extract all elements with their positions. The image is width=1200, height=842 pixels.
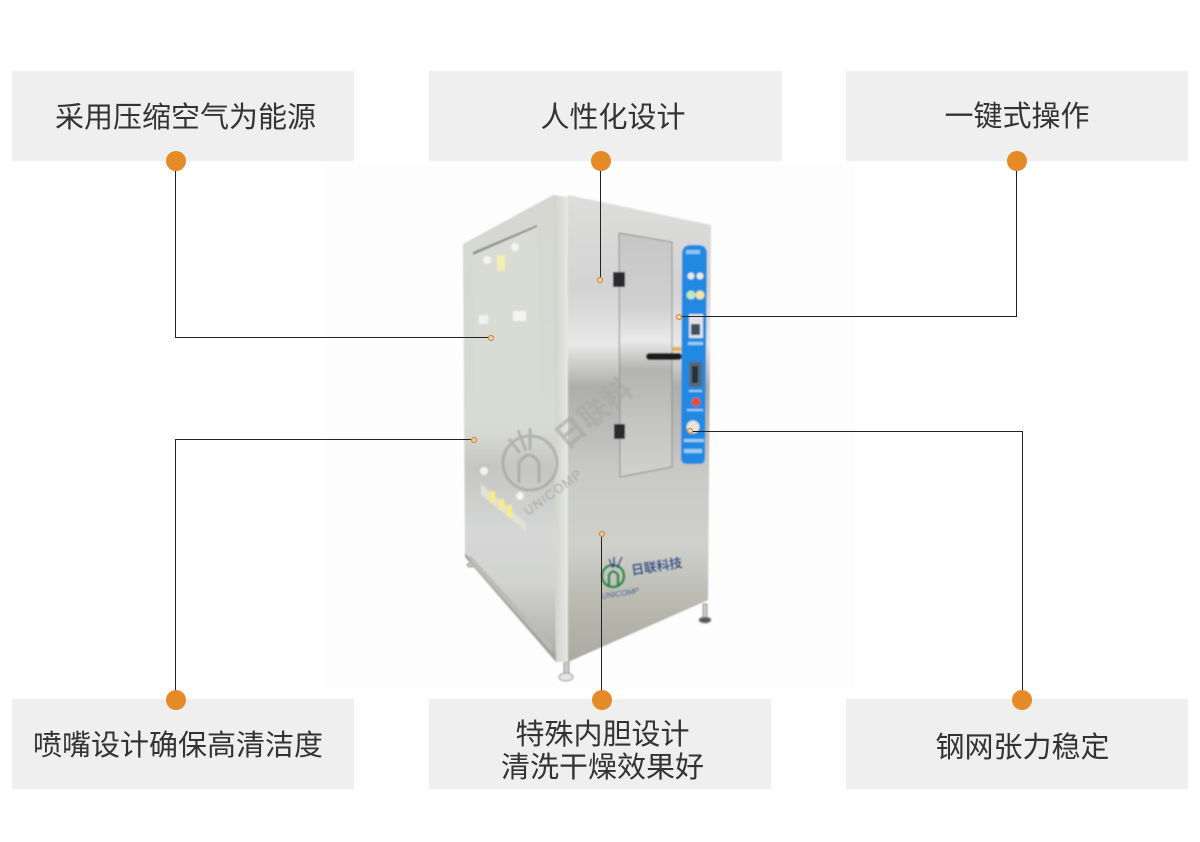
- label: user-friendly design: [429, 71, 782, 161]
- label: special inner tank: 清洗干燥效果好: [501, 752, 704, 784]
- front logo subtext: UNICOMP: [601, 586, 640, 601]
- machine feet: [467, 553, 711, 681]
- watermark brand characters: 日联科: [549, 372, 639, 455]
- label: stable stencil tension: [846, 699, 1188, 789]
- blue control panel: [681, 245, 707, 464]
- side labels and latches: [479, 243, 526, 531]
- corner pillar: [553, 195, 568, 662]
- hinges: [613, 272, 625, 287]
- label: compressed air: 采用压缩空气为能源: [55, 102, 316, 134]
- leader lines: [176, 161, 1022, 700]
- left side of cabinet: [463, 195, 556, 662]
- dot: top left: [166, 151, 186, 171]
- label: one-key operation: [846, 71, 1188, 161]
- label: user-friendly design: 人性化设计: [540, 102, 686, 134]
- door: [619, 233, 672, 477]
- label: nozzle design: [12, 699, 354, 789]
- dot: bottom left: [166, 690, 186, 710]
- front of cabinet: [568, 195, 711, 662]
- small target markers: [472, 278, 692, 536]
- dot: top right: [1007, 151, 1027, 171]
- faint photo background: [325, 165, 855, 690]
- dot: bottom centre: [592, 690, 612, 710]
- label: one-key operation: 一键式操作: [944, 100, 1090, 132]
- label: compressed air: [12, 71, 354, 161]
- label: special inner tank: [429, 699, 771, 789]
- dot: bottom right: [1012, 690, 1032, 710]
- front logo text: 日联科技: [630, 555, 683, 578]
- dot: top centre: [591, 151, 611, 171]
- label: stable stencil tension: 钢网张力稳定: [935, 732, 1110, 764]
- label: nozzle design: 喷嘴设计确保高清洁度: [33, 730, 323, 762]
- front logo: [602, 557, 624, 587]
- label: special inner tank: 特殊内胆设计: [515, 718, 690, 750]
- machine: [463, 195, 711, 681]
- handle: [646, 353, 682, 360]
- watermark text: UNICOMP: [521, 466, 585, 518]
- watermark logo: [503, 428, 557, 490]
